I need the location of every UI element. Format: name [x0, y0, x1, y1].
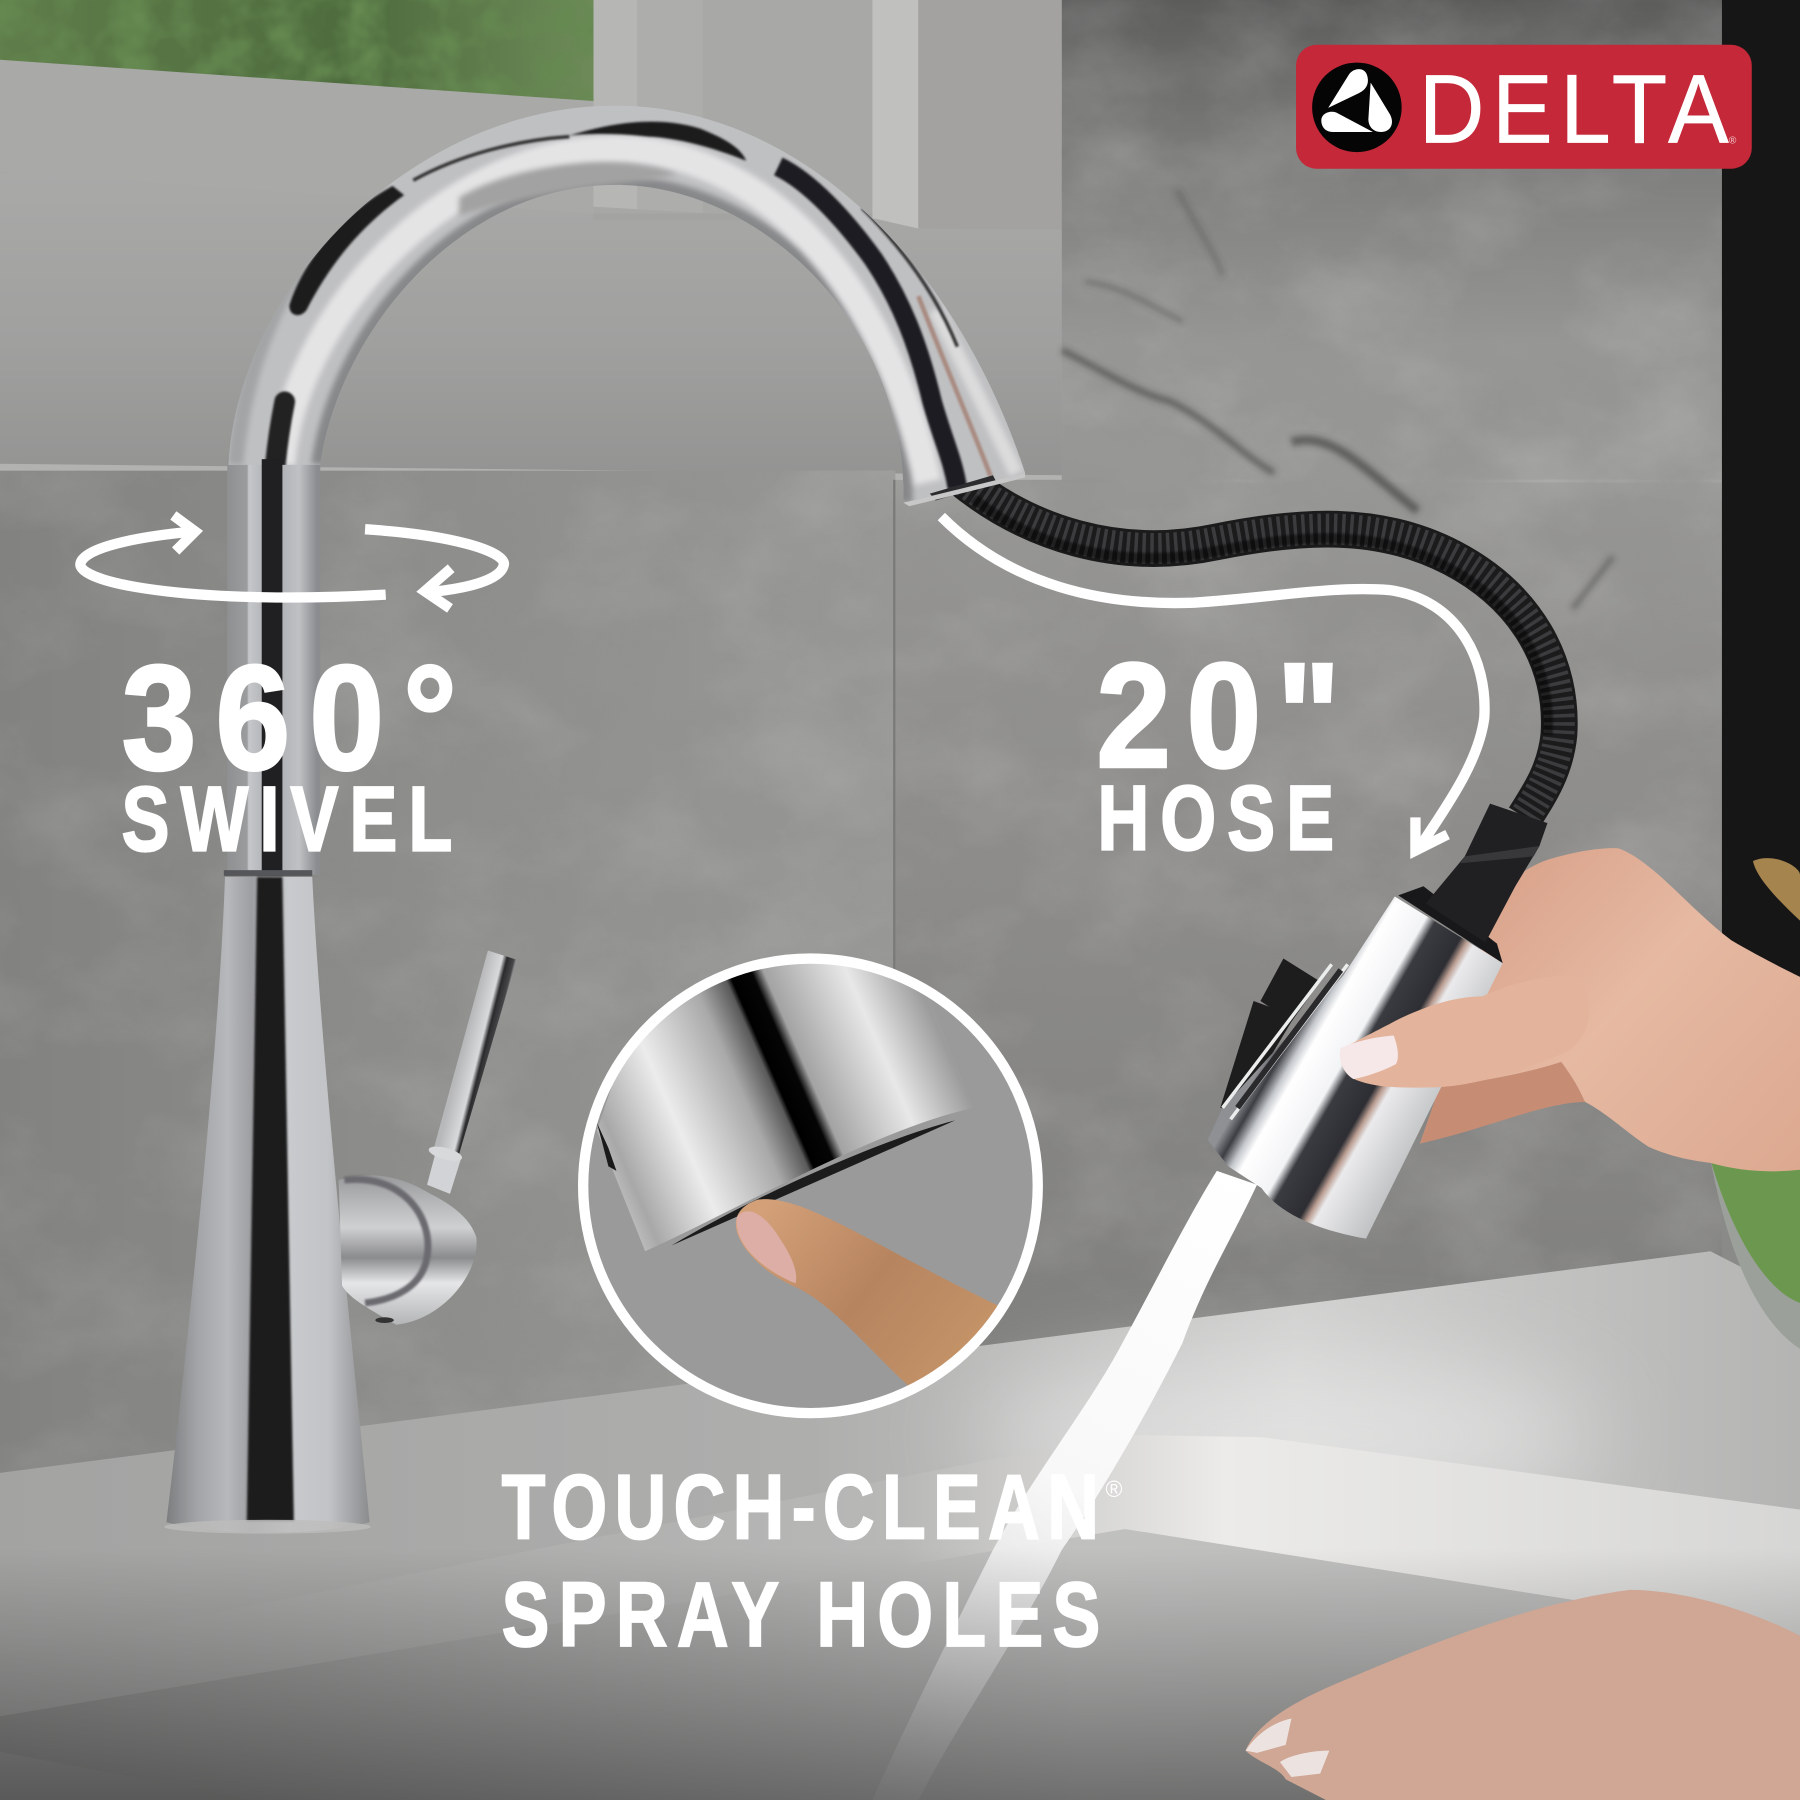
touch-clean inset — [583, 941, 1038, 1413]
logo triangle mark — [1312, 63, 1402, 152]
inset finger nail — [737, 1211, 796, 1283]
window with green outdoor view — [0, 0, 918, 228]
lower finger shading — [1420, 1062, 1585, 1143]
touch-clean caption — [502, 1456, 1122, 1666]
spray head rails — [1223, 964, 1348, 1119]
faucet collar — [224, 870, 312, 876]
salad bowl — [1710, 1159, 1800, 1349]
swivel rotation arrows — [80, 515, 504, 608]
handle lever — [427, 951, 517, 1194]
faucet — [164, 98, 1033, 1534]
hand holding spray head — [1420, 848, 1800, 1171]
hose — [959, 476, 1559, 817]
arch dark reflections — [264, 120, 994, 489]
stem dark reflection — [262, 459, 282, 875]
inset photo — [597, 941, 1004, 1395]
swivel feature — [80, 515, 504, 871]
swivel value: 360° — [122, 635, 476, 802]
caption line one: TOUCH-CLEAN — [502, 1456, 1106, 1558]
caption registered mark: ® — [1105, 1476, 1122, 1502]
spotlight on counter — [976, 1355, 1596, 1515]
spray head — [1208, 804, 1547, 1239]
sink basin — [0, 1529, 1800, 1800]
inset ring — [583, 959, 1038, 1413]
logo wordmark: DELTA — [1419, 54, 1736, 163]
hose value: 20" — [1096, 632, 1356, 799]
dark side cabinet and wooden spoon — [1722, 0, 1800, 1033]
sink rim — [0, 1435, 1800, 1716]
back of hand and lower fingers — [1420, 848, 1800, 1171]
water stream — [872, 1171, 1257, 1800]
hose connector — [1398, 804, 1547, 963]
hose label: HOSE — [1097, 767, 1345, 870]
spout outlet — [903, 473, 1025, 506]
front sink edge — [0, 1752, 253, 1800]
marble wall right — [895, 0, 1722, 1352]
caption line two: SPRAY HOLES — [502, 1564, 1110, 1666]
faucet arch and spout — [228, 106, 1025, 502]
handle hub — [339, 1175, 477, 1325]
hose length arrow — [941, 517, 1485, 851]
lower hand in sink — [1246, 1590, 1800, 1800]
faucet stem — [227, 459, 320, 875]
logo badge — [1296, 45, 1752, 169]
inset background — [583, 959, 1038, 1413]
inset spray holes rim — [672, 1120, 955, 1246]
upper wall panel and ledge — [0, 0, 1062, 483]
thumb nail — [1340, 1035, 1398, 1079]
faucet base foot — [164, 1520, 371, 1534]
logo registered mark: ® — [1729, 135, 1737, 146]
hose feature — [941, 517, 1485, 870]
swivel label: SWIVEL — [122, 768, 463, 871]
tiled wall left — [0, 471, 895, 1492]
counter top — [0, 1251, 1800, 1800]
spray head buttons — [1220, 959, 1320, 1108]
cone dark reflection — [247, 877, 294, 1521]
arch reflection lens — [459, 163, 677, 216]
inset spray head — [597, 941, 973, 1251]
faucet cone base — [166, 877, 370, 1533]
thumb — [1340, 976, 1590, 1088]
inset finger — [736, 1199, 1004, 1395]
spray head body — [1208, 897, 1503, 1239]
